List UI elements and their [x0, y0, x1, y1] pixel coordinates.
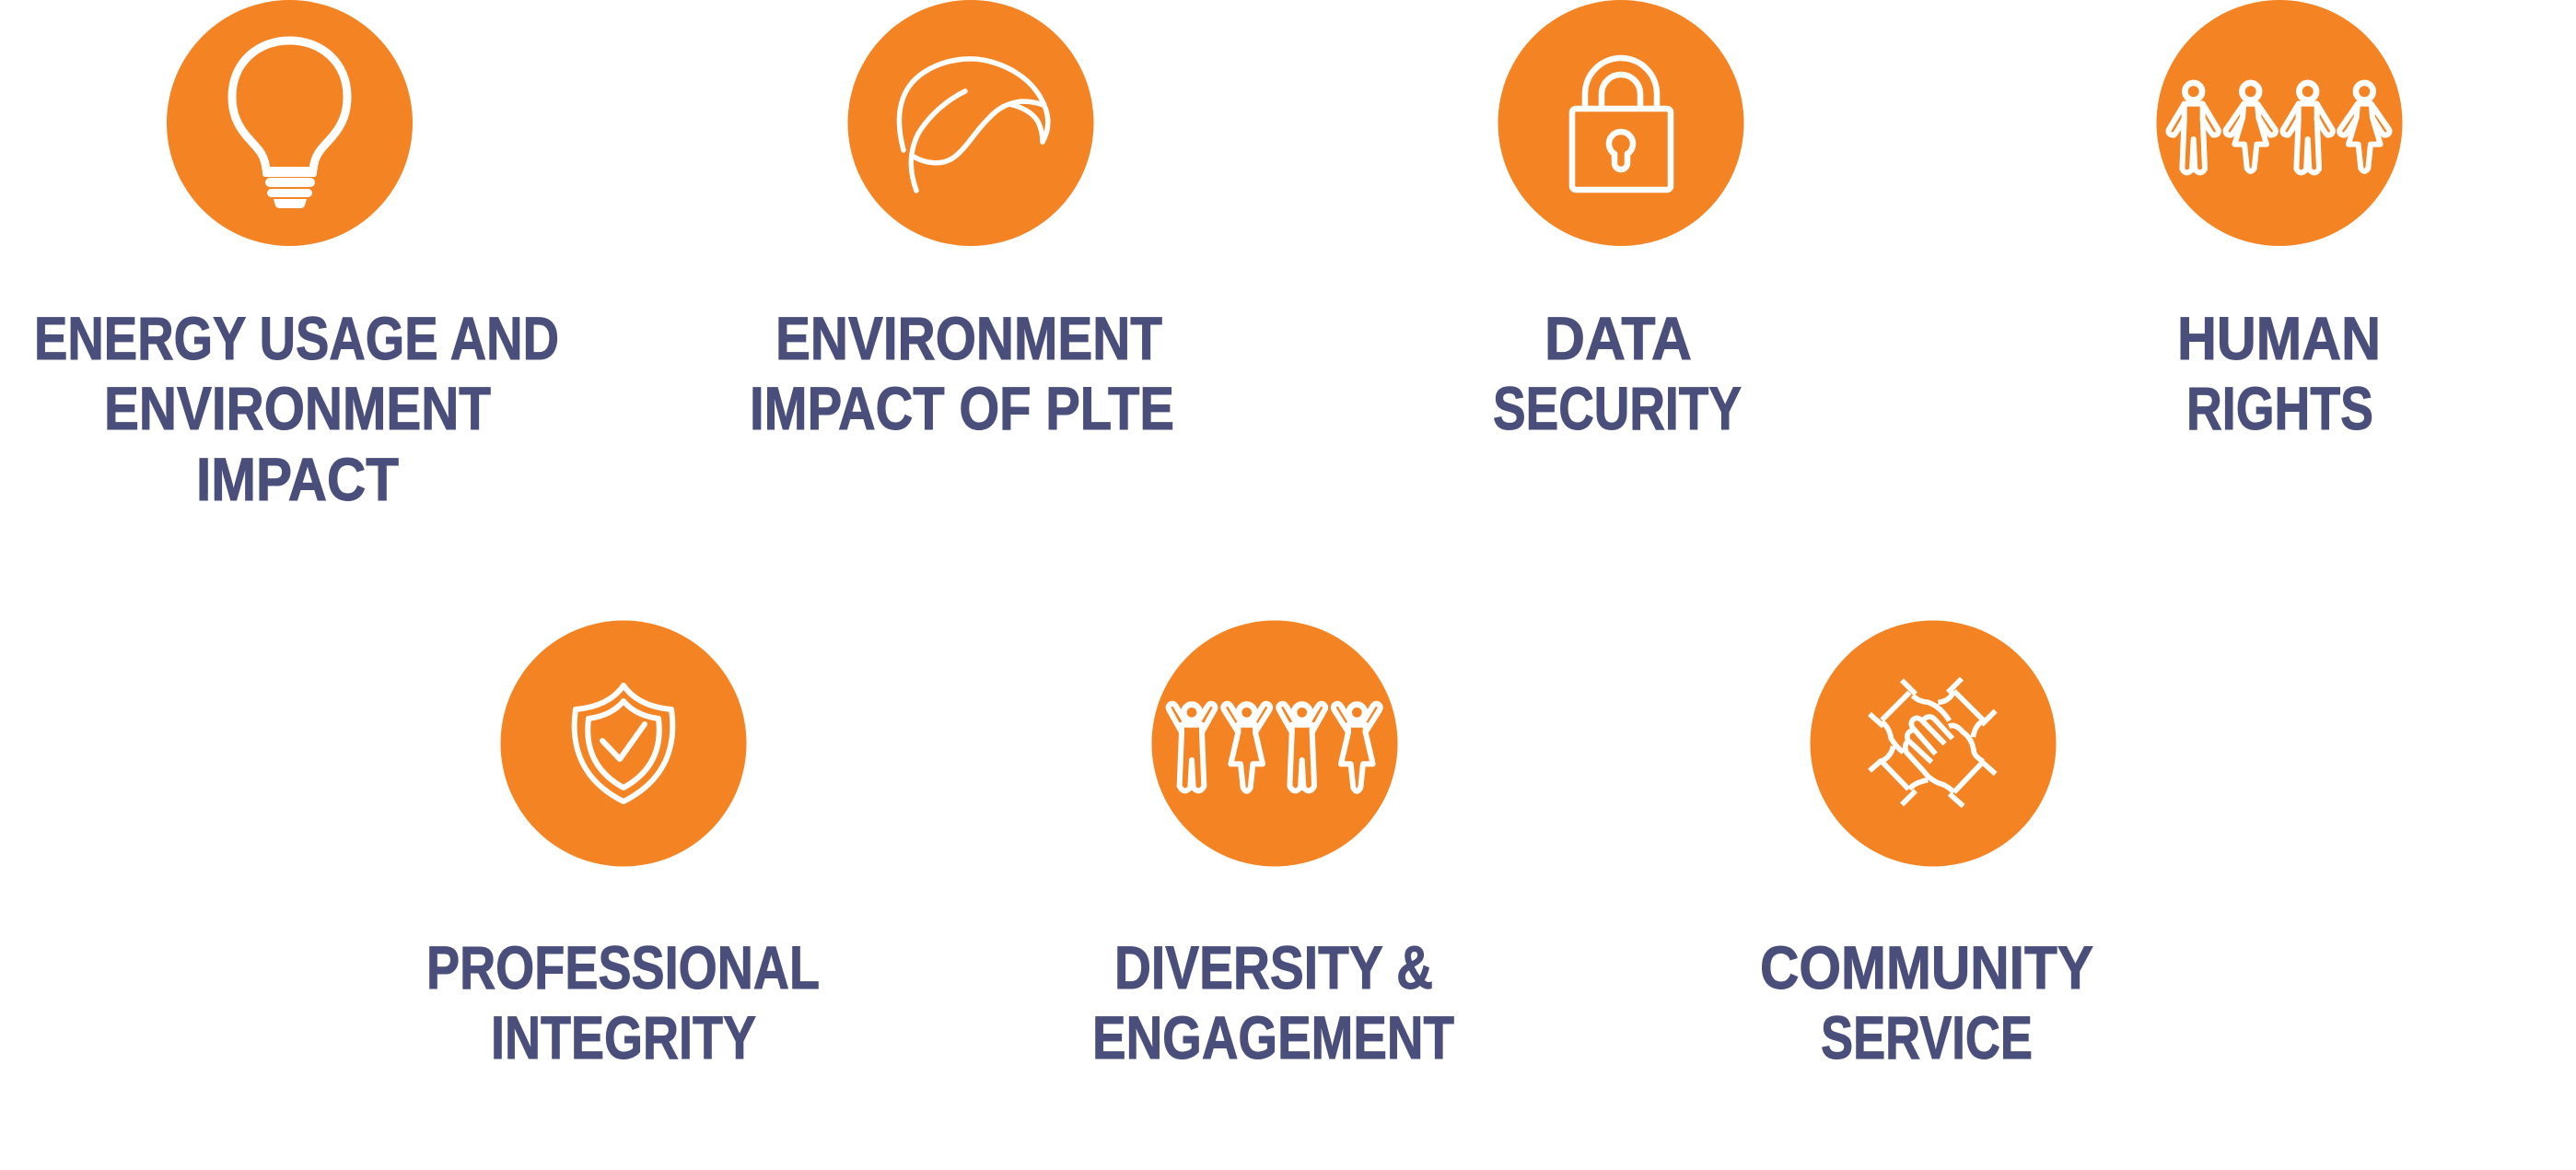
label: energy usage and environment impact: IMPACT	[196, 445, 399, 513]
label: community service: COMMUNITY	[1760, 933, 2093, 1001]
label: data security: SECURITY	[1493, 374, 1742, 442]
icon: joined hands	[1870, 679, 1996, 806]
icon: four people standing	[2169, 83, 2389, 172]
orange circle	[501, 621, 746, 866]
label: data security: DATA	[1544, 304, 1692, 372]
label: data security	[1493, 304, 1742, 442]
item: environment impact of PLTE	[750, 0, 1174, 442]
label: professional integrity: PROFESSIONAL	[426, 933, 820, 1001]
label: professional integrity	[426, 933, 820, 1071]
orange circle	[847, 0, 1094, 246]
label: environment impact of PLTE: ENVIRONMENT	[775, 304, 1162, 372]
icon: light bulb	[232, 41, 347, 208]
item: human rights	[2157, 0, 2402, 442]
label: human rights	[2177, 304, 2381, 442]
label: community service	[1760, 933, 2093, 1071]
icon: four people with raised arms	[1169, 704, 1381, 791]
label: diversity and engagement	[1092, 933, 1454, 1071]
orange circle	[1498, 0, 1744, 246]
item: data security	[1493, 0, 1744, 442]
item: energy usage	[34, 0, 559, 513]
label: human rights: HUMAN	[2177, 304, 2381, 372]
label: energy usage and environment impact: ENERGY USAGE AND	[34, 304, 559, 372]
orange circle	[2157, 0, 2402, 246]
item: diversity and engagement	[1092, 621, 1454, 1071]
label: professional integrity: INTEGRITY	[491, 1003, 756, 1071]
icon: shield with check	[575, 685, 672, 801]
label: energy usage and environment impact: ENVIRONMENT	[104, 374, 491, 442]
item: professional integrity	[426, 621, 820, 1071]
orange circle	[1811, 621, 2056, 866]
label: environment impact of PLTE: IMPACT OF PLTE	[750, 374, 1174, 442]
label: diversity and engagement: ENGAGEMENT	[1092, 1003, 1454, 1071]
label: human rights: RIGHTS	[2186, 374, 2373, 442]
label: diversity and engagement: DIVERSITY &	[1114, 933, 1433, 1001]
label: energy usage and environment impact	[34, 304, 559, 513]
label: environment impact of PLTE	[750, 304, 1174, 442]
label: community service: SERVICE	[1821, 1003, 2033, 1071]
orange circle	[1151, 621, 1398, 866]
orange circle	[167, 0, 413, 246]
icon: padlock	[1572, 58, 1671, 190]
item: community service	[1760, 621, 2093, 1071]
icon: leaf	[899, 59, 1048, 191]
